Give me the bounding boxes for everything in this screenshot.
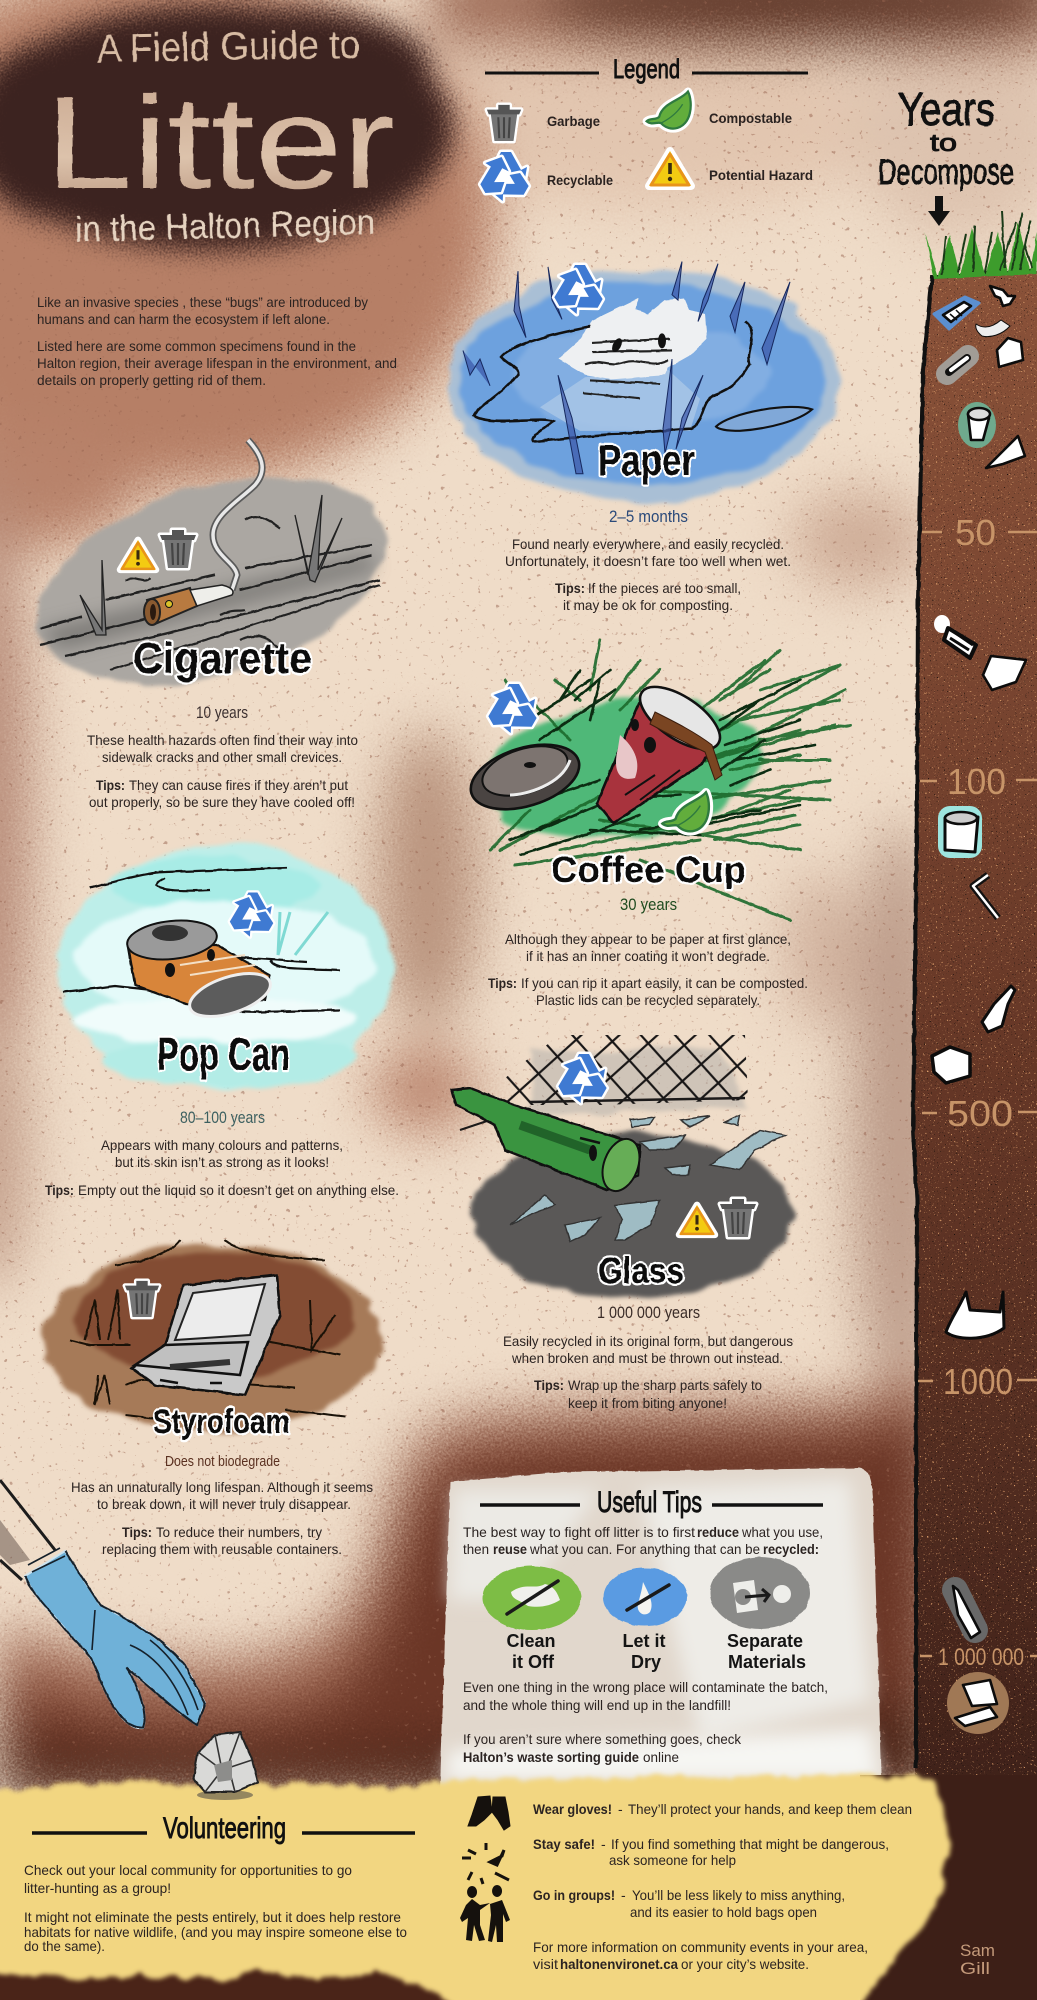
text: glass description	[503, 1333, 793, 1411]
text: paper description: If the pieces are too small,	[588, 580, 741, 596]
heading: glass: Glass	[598, 1250, 684, 1291]
text: glass description: Tips:	[534, 1377, 564, 1393]
illustration: pop can in snow	[57, 846, 393, 1090]
icon: food tub	[932, 1047, 970, 1083]
text: stay safe	[533, 1836, 889, 1868]
legend item: potential hazard: Potential Hazard	[709, 167, 813, 183]
lifespan: paper: 2–5 months	[609, 507, 688, 526]
heading: pop can: Pop Can	[157, 1028, 290, 1080]
icon: buried coffee cup	[958, 402, 996, 448]
icon: sock	[976, 320, 1010, 337]
text: tips intro: The best way to fight off litter is to first	[463, 1524, 695, 1540]
text: go in groups: Go in groups!	[533, 1887, 615, 1903]
text: tips intro: what you use,	[741, 1524, 823, 1540]
text: coffee cup description: if it has an inner coating it won’t degrade.	[526, 948, 770, 964]
text: tips intro: reuse	[493, 1541, 527, 1557]
text: paper description: it may be ok for composting.	[563, 597, 733, 613]
icon: garbage	[125, 1281, 159, 1317]
text: contamination note: If you aren’t sure where something goes, check	[463, 1731, 742, 1747]
legend item: compostable: Compostable	[709, 110, 792, 126]
intro text	[37, 294, 397, 388]
text: volunteering description: Check out your local community for opportunities to go	[24, 1862, 352, 1878]
heading: styrofoam: Styrofoam	[153, 1403, 290, 1441]
text: stay safe: ask someone for help	[609, 1852, 736, 1868]
grass on top of soil	[925, 211, 1037, 279]
depth scale: years markers: 100	[947, 761, 1006, 802]
icons: hazard and garbage	[120, 530, 196, 570]
icon: broken glass	[462, 1843, 509, 1884]
text: cigarette description: sidewalk cracks and other small crevices.	[102, 749, 342, 765]
text: pop can description: Tips:	[45, 1182, 74, 1198]
text: contamination note: Halton’s waste sorting guide	[463, 1749, 639, 1765]
text: pop can description	[45, 1137, 399, 1198]
text: coffee cup description: Tips:	[488, 975, 517, 991]
icon: buried spring toy	[934, 615, 976, 658]
signature: sam gill: Sam	[960, 1941, 995, 1960]
text: styrofoam description	[71, 1479, 373, 1557]
illustration: styrofoam box on dirt	[42, 1240, 382, 1430]
intro text: Listed here are some common specimens found in the	[37, 338, 356, 354]
text: contamination note: online	[643, 1749, 679, 1765]
intro text: Like an invasive species , these “bugs” are introduced by	[37, 294, 368, 310]
specimen: pop can	[45, 846, 399, 1198]
text: pop can description: but its skin isn’t as strong as it looks!	[115, 1154, 329, 1170]
volunteering yellow band	[0, 1774, 947, 2000]
text: styrofoam description: Has an unnaturally long lifespan. Although it seems	[71, 1479, 373, 1495]
illustration: coffee cup in pine needles	[463, 640, 850, 920]
text: styrofoam description: to break down, it will never truly disappear.	[97, 1496, 351, 1512]
lifespan: glass: 1 000 000 years	[597, 1303, 700, 1322]
lifespan: pop can: 80–100 years	[180, 1108, 265, 1127]
text: wear gloves: Wear gloves!	[533, 1801, 612, 1817]
arrow: down to soil	[928, 196, 950, 226]
heading: cigarette: Cigarette	[133, 634, 312, 683]
text: more information	[533, 1939, 868, 1972]
intro text: details on properly getting rid of them.	[37, 372, 266, 388]
text: stay safe: If you find something that might be dangerous,	[611, 1836, 889, 1852]
text: volunteering description: habitats for native wildlife, (and you may inspire someone else to	[24, 1924, 407, 1940]
text: volunteering description: do the same).	[24, 1938, 105, 1954]
icon: plastic bottle	[982, 986, 1015, 1032]
lifespan: cigarette: 10 years	[196, 703, 248, 722]
labels: recycling steps: Materials	[728, 1652, 806, 1672]
text: paper description: Unfortunately, it doesn’t fare too well when wet.	[505, 553, 791, 569]
depth scale: years markers: 1000	[943, 1361, 1013, 1402]
text: more information: For more information on community events in your area,	[533, 1939, 868, 1955]
icon: buried pop can	[938, 806, 982, 858]
illustration: crumpled paper	[193, 1732, 258, 1800]
title: a field guide to: A Field Guide to	[97, 23, 360, 71]
specimen: cigarette	[12, 437, 412, 810]
text: paper description	[505, 536, 791, 613]
heading: coffee cup: Coffee Cup	[551, 849, 746, 890]
useful tips panel	[440, 1468, 882, 1790]
illustration: cigarette on pavement	[12, 437, 412, 723]
icon: plastic bag	[946, 1292, 1004, 1338]
text: coffee cup description: If you can rip it apart easily, it can be composted.	[521, 975, 808, 991]
specimen: paper	[448, 262, 840, 613]
labels: recycling steps	[506, 1631, 806, 1672]
text: styrofoam description: To reduce their numbers, try	[156, 1524, 322, 1540]
labels: recycling steps: Separate	[727, 1631, 803, 1651]
legend item: compostable	[647, 92, 792, 129]
icons: recyclable and compostable	[480, 684, 709, 831]
text: wear gloves: They’ll protect your hands, and keep them clean	[628, 1801, 912, 1817]
title: litter: Litter	[45, 69, 395, 216]
soil column	[910, 268, 1037, 1775]
text: volunteering description: It might not eliminate the pests entirely, but it does help restore	[24, 1909, 401, 1925]
text: cigarette description	[87, 732, 358, 810]
text: coffee cup description: Plastic lids can be recycled separately.	[536, 992, 760, 1008]
text: paper description: Tips:	[555, 580, 585, 596]
icon: buried styrofoam box	[947, 1672, 1009, 1734]
text: tips intro: what you can. For anything that can be	[529, 1541, 760, 1557]
text: volunteering description: litter-hunting as a group!	[24, 1880, 171, 1896]
text: wear gloves: -	[618, 1801, 623, 1817]
icon: recyclable	[546, 265, 606, 322]
heading: years to decompose: Years	[898, 83, 995, 135]
legend heading: Legend	[613, 54, 680, 84]
title block	[0, 6, 452, 250]
icon: clean it off	[483, 1566, 581, 1630]
icon: buried cigarette	[947, 356, 968, 374]
legend item: garbage	[487, 105, 600, 141]
illustration: gloved hand	[0, 1480, 205, 1728]
icon: buried paper	[934, 297, 979, 329]
text: paper description: Found nearly everywhere, and easily recycled.	[512, 536, 784, 552]
text: volunteering description	[24, 1862, 407, 1954]
specimen: glass	[452, 1035, 793, 1411]
text: contamination note: and the whole thing will end up in the landfill!	[463, 1697, 731, 1713]
text: more information: or your city’s website.	[681, 1956, 809, 1972]
text: stay safe: Stay safe!	[533, 1836, 595, 1852]
bottom dark soil edges	[0, 1775, 1037, 2000]
text: tips intro: recycled:	[763, 1541, 819, 1557]
text: glass description: keep it from biting anyone!	[568, 1395, 727, 1411]
text: pop can description: Appears with many colours and patterns,	[101, 1137, 343, 1153]
icon: let it dry	[603, 1568, 687, 1626]
icon: milk carton	[997, 338, 1023, 367]
labels: recycling steps: Clean	[506, 1631, 556, 1651]
text: cigarette description: Tips:	[96, 777, 125, 793]
icon: apple core	[990, 286, 1015, 306]
text: coffee cup description: Although they appear to be paper at first glance,	[505, 931, 791, 947]
lifespan: coffee cup: 30 years	[620, 895, 677, 914]
panel: volunteering	[24, 1812, 415, 1954]
depth scale: years markers: 50	[955, 512, 996, 553]
title dark blot	[0, 6, 452, 250]
safety tips list	[460, 1796, 912, 1972]
title: in the halton region: in the Halton Region	[75, 201, 375, 250]
icon: chip bag	[983, 656, 1026, 690]
icons: recyclable, hazard and garbage	[550, 1054, 756, 1237]
illustration: broken glass bottle	[452, 1035, 792, 1297]
heading: volunteering: Volunteering	[163, 1812, 286, 1845]
icon: group of people	[460, 1885, 510, 1942]
depth scale: years markers: 500	[947, 1093, 1013, 1134]
intro text: Halton region, their average lifespan in the environment, and	[37, 355, 397, 371]
text: coffee cup description	[488, 931, 808, 1008]
text: cigarette description: These health hazards often find their way into	[87, 732, 358, 748]
text: glass description: when broken and must be thrown out instead.	[511, 1350, 783, 1366]
text: pop can description: Empty out the liquid so it doesn’t get on anything else.	[78, 1182, 399, 1198]
text: tips intro: then	[463, 1541, 489, 1557]
text: cigarette description: out properly, so be sure they have cooled off!	[89, 794, 355, 810]
intro text: humans and can harm the ecosystem if left alone.	[37, 311, 330, 327]
signature: sam gill	[960, 1941, 995, 1978]
text: styrofoam description: replacing them with reusable containers.	[102, 1541, 342, 1557]
text: tips intro	[463, 1524, 823, 1557]
icon: shoe	[986, 436, 1025, 468]
text: cigarette description: They can cause fires if they aren’t put	[129, 777, 348, 793]
text: tips intro: reduce	[697, 1524, 739, 1540]
labels: recycling steps: Let it	[622, 1631, 666, 1651]
illustration: paper in puddle	[448, 262, 840, 499]
text: styrofoam description: Tips:	[122, 1524, 152, 1540]
signature: sam gill: Gill	[960, 1959, 990, 1978]
heading: paper: Paper	[598, 436, 695, 485]
heading: years to decompose	[878, 83, 1014, 226]
text: more information: haltonenvironet.ca	[560, 1956, 678, 1972]
text: go in groups: You’ll be less likely to miss anything,	[632, 1887, 845, 1903]
icon: buried glass bottle	[953, 1586, 980, 1638]
icon: straw	[973, 875, 998, 918]
lifespan: styrofoam: Does not biodegrade	[165, 1453, 280, 1470]
labels: recycling steps: it Off	[512, 1652, 555, 1672]
text: go in groups	[533, 1887, 845, 1920]
legend	[472, 54, 813, 209]
legend item: recyclable	[472, 152, 613, 209]
labels: recycling steps: Dry	[631, 1652, 661, 1672]
text: go in groups: and its easier to hold bags open	[630, 1904, 817, 1920]
heading: useful tips: Useful Tips	[597, 1486, 702, 1519]
text: glass description: Wrap up the sharp parts safely to	[568, 1377, 762, 1393]
soil items: buried litter icons	[932, 286, 1026, 1734]
depth scale: years markers	[918, 512, 1037, 1671]
legend item: garbage: Garbage	[547, 113, 600, 129]
legend item: potential hazard	[649, 151, 813, 186]
specimen: coffee cup	[463, 640, 850, 1008]
text: more information: visit	[533, 1956, 558, 1972]
text: contamination note	[463, 1679, 828, 1765]
heading: years to decompose: to	[930, 130, 957, 157]
text: go in groups: -	[621, 1887, 626, 1903]
text: contamination note: Even one thing in the wrong place will contaminate the batch,	[463, 1679, 828, 1695]
legend item: recyclable: Recyclable	[547, 172, 613, 188]
icon: gloves	[468, 1796, 510, 1830]
icon: recyclable	[223, 892, 276, 943]
specimen: styrofoam	[42, 1240, 382, 1557]
icon: separate materials	[710, 1557, 810, 1629]
text: glass description: Easily recycled in its original form, but dangerous	[503, 1333, 793, 1349]
text: stay safe: -	[601, 1836, 606, 1852]
